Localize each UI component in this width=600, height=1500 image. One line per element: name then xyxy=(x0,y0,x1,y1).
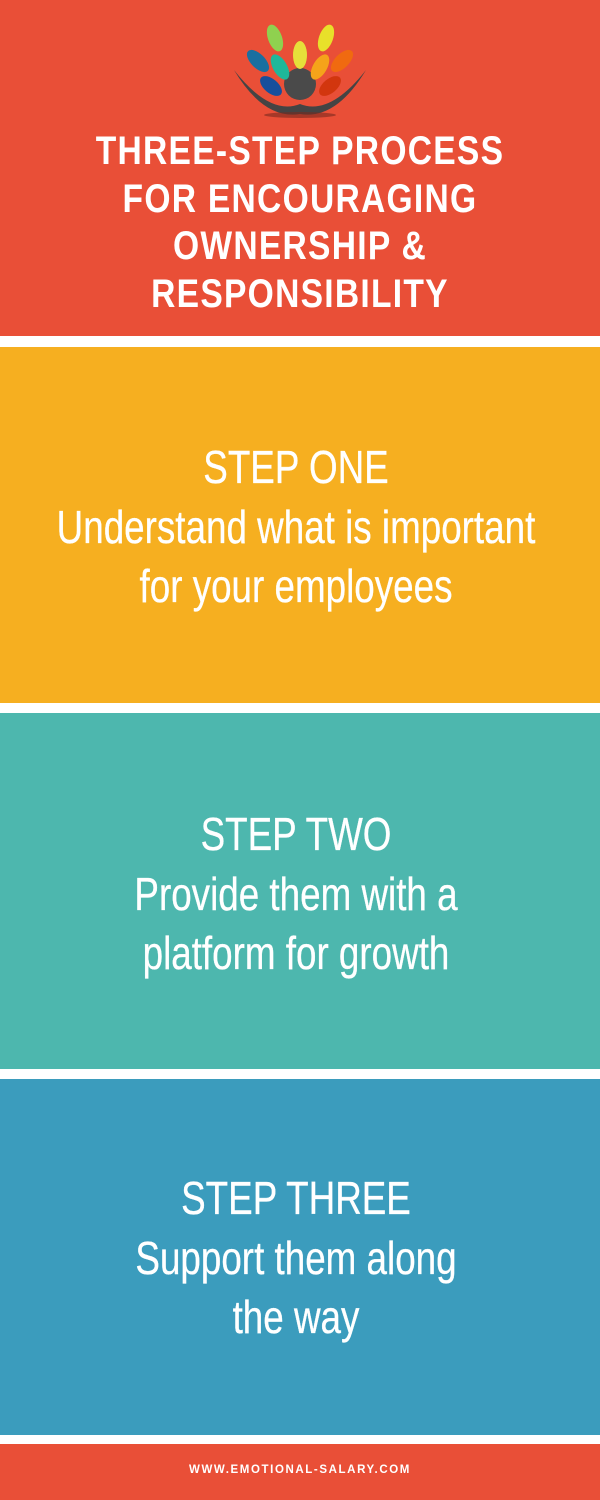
logo icon xyxy=(234,24,366,118)
step three text xyxy=(135,1172,457,1343)
step two text: Provide them with a xyxy=(134,868,458,920)
step one text: STEP ONE xyxy=(203,441,389,493)
title xyxy=(96,129,504,316)
title: THREE-STEP PROCESS xyxy=(96,129,504,173)
title: RESPONSIBILITY xyxy=(151,272,449,316)
panel: step two xyxy=(0,713,600,1069)
footer xyxy=(0,1444,600,1500)
step three text: Support them along xyxy=(135,1232,457,1284)
step one text xyxy=(57,441,536,612)
step one text: for your employees xyxy=(140,560,452,612)
panel: step three xyxy=(0,1079,600,1435)
title: OWNERSHIP & xyxy=(173,224,427,268)
title: FOR ENCOURAGING xyxy=(123,176,477,220)
step one text: Understand what is important xyxy=(57,500,535,552)
step two text: STEP TWO xyxy=(201,808,391,860)
footer url: WWW.EMOTIONAL-SALARY.COM xyxy=(189,1464,411,1476)
panel: step one xyxy=(0,347,600,703)
step three text: STEP THREE xyxy=(181,1172,411,1224)
header panel xyxy=(0,0,600,336)
step three text: the way xyxy=(233,1291,359,1343)
step two text xyxy=(134,808,458,979)
step two text: platform for growth xyxy=(143,927,449,979)
